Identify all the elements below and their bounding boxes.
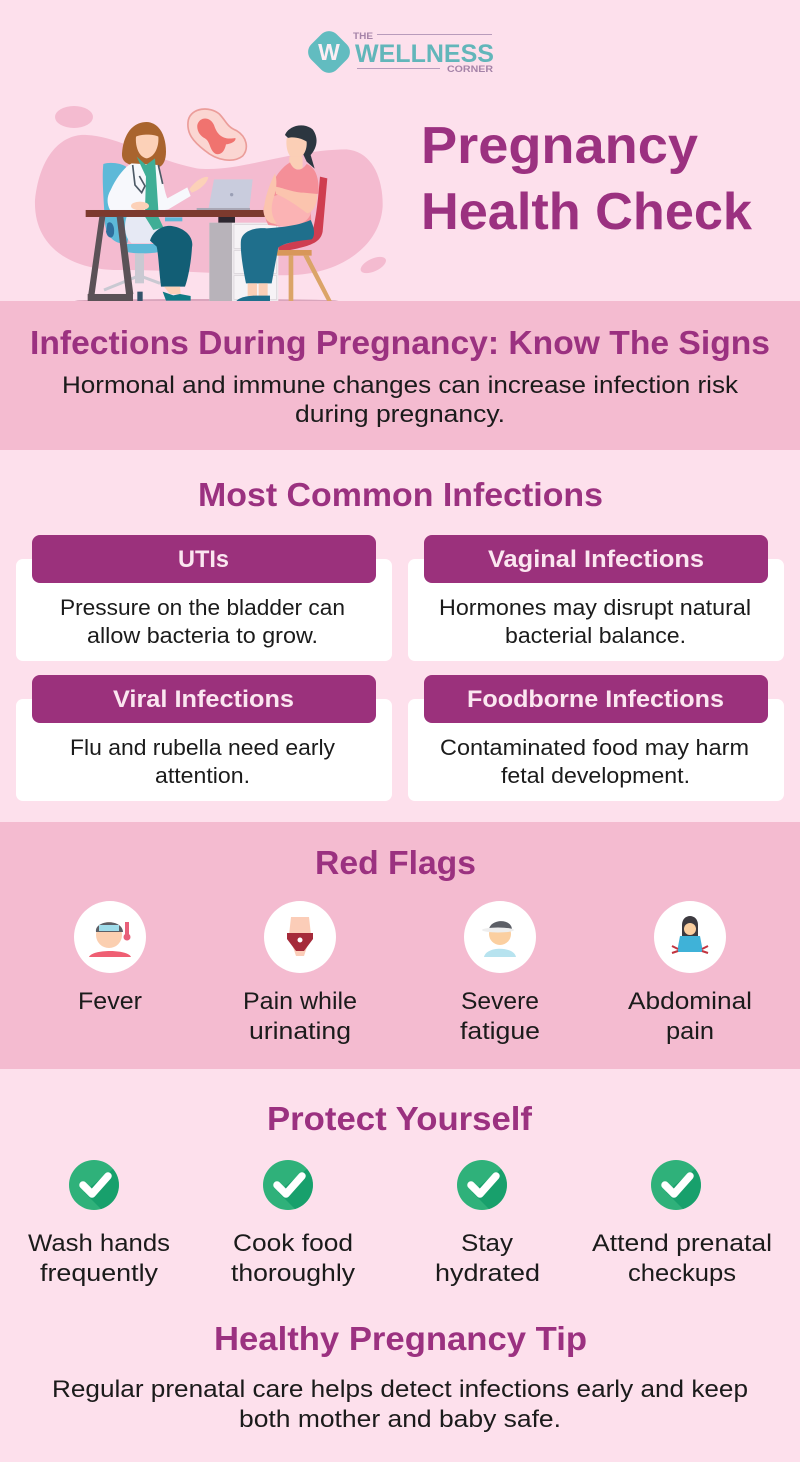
panel: viral infections: attention. <box>155 763 250 788</box>
panel: viral infections <box>16 675 392 801</box>
item: cook food <box>231 1160 355 1287</box>
label: severe fatigue <box>460 988 540 1045</box>
panel: UTIs: Pressure on the bladder can <box>60 595 345 620</box>
item: stay hydrated <box>435 1160 540 1287</box>
item: stay hydrated: hydrated <box>435 1260 540 1287</box>
laptop <box>197 179 253 210</box>
icon: check <box>69 1160 119 1210</box>
item: attend prenatal checkups: Attend prenatal <box>592 1230 772 1257</box>
intro text <box>62 372 739 428</box>
desk <box>86 210 265 301</box>
ground shadow <box>75 299 338 302</box>
icon: check <box>263 1160 313 1210</box>
title: Health Check <box>421 183 752 241</box>
panel: foodborne infections <box>408 675 784 801</box>
intro text: Hormonal and immune changes can increase infection risk <box>62 372 739 399</box>
patient chair <box>277 177 332 301</box>
panel: UTIs: UTIs <box>178 546 229 573</box>
label: abdominal pain <box>628 988 752 1045</box>
icon: fever <box>74 901 146 973</box>
doctor <box>108 122 208 301</box>
item: stay hydrated: Stay <box>461 1230 513 1257</box>
item: cook food: Cook food <box>233 1230 353 1257</box>
logo: The Wellness Corner: WELLNESS <box>355 40 494 68</box>
item: attend prenatal checkups <box>592 1160 772 1287</box>
panel: foodborne infections: Contaminated food may harm <box>440 735 749 760</box>
doctor chair <box>103 163 182 301</box>
text: tip: both mother and baby safe. <box>239 1406 561 1433</box>
item: wash hands: Wash hands <box>28 1230 170 1257</box>
illustration: doctor and pregnant patient at a desk <box>75 109 338 302</box>
panel: viral infections: Flu and rubella need early <box>70 735 335 760</box>
heading: red flags: Red Flags <box>315 844 476 881</box>
icon: fetus in womb <box>188 109 246 160</box>
label: abdominal pain: Abdominal <box>628 988 752 1015</box>
heading: healthy pregnancy tip: Healthy Pregnancy Tip <box>214 1320 587 1357</box>
illustration background blobs <box>35 106 388 276</box>
item: cook food: thoroughly <box>231 1260 355 1287</box>
heading: protect yourself: Protect Yourself <box>267 1100 533 1137</box>
panel: vaginal infections: bacterial balance. <box>505 623 686 648</box>
panel: vaginal infections: Hormones may disrupt natural <box>439 595 751 620</box>
item: attend prenatal checkups: checkups <box>628 1260 736 1287</box>
icon: pain while urinating <box>264 901 336 973</box>
icon: check <box>651 1160 701 1210</box>
title: Pregnancy <box>421 117 698 175</box>
icon: abdominal pain <box>654 901 726 973</box>
heading: most common infections: Most Common Infections <box>198 476 603 513</box>
label: pain while urinating <box>243 988 357 1045</box>
logo: The Wellness Corner <box>304 27 494 77</box>
panel: vaginal infections: Vaginal Infections <box>488 546 704 573</box>
panel: foodborne infections: Foodborne Infections <box>467 686 724 713</box>
label: severe fatigue: fatigue <box>460 1018 540 1045</box>
pregnant patient <box>236 125 319 302</box>
label: severe fatigue: Severe <box>461 988 539 1015</box>
title <box>421 117 752 241</box>
panel: foodborne infections: fetal development. <box>501 763 690 788</box>
item: wash hands: frequently <box>40 1260 158 1287</box>
desk drawers <box>209 217 278 301</box>
panel: intro band <box>0 301 800 450</box>
panel: UTIs <box>16 535 392 661</box>
panel: red flags <box>0 822 800 1069</box>
item: wash hands <box>28 1160 170 1287</box>
text: tip <box>52 1376 748 1433</box>
logo: The Wellness Corner: THE <box>353 31 373 41</box>
icon: severe fatigue <box>464 901 536 973</box>
panel: vaginal infections <box>408 535 784 661</box>
logo: The Wellness Corner: CORNER <box>447 64 494 74</box>
label: pain while urinating: urinating <box>249 1018 351 1045</box>
panel: UTIs: allow bacteria to grow. <box>87 623 318 648</box>
label: pain while urinating: Pain while <box>243 988 357 1015</box>
label: abdominal pain: pain <box>666 1018 714 1045</box>
intro text: during pregnancy. <box>295 401 505 428</box>
panel: viral infections: Viral Infections <box>113 686 294 713</box>
text: tip: Regular prenatal care helps detect infections early and keep <box>52 1376 748 1403</box>
heading: infections during pregnancy: Infections During Pregnancy: Know The Signs <box>30 324 770 361</box>
icon: check <box>457 1160 507 1210</box>
label: fever: Fever <box>78 988 142 1015</box>
logo: The Wellness Corner: W <box>318 39 340 65</box>
